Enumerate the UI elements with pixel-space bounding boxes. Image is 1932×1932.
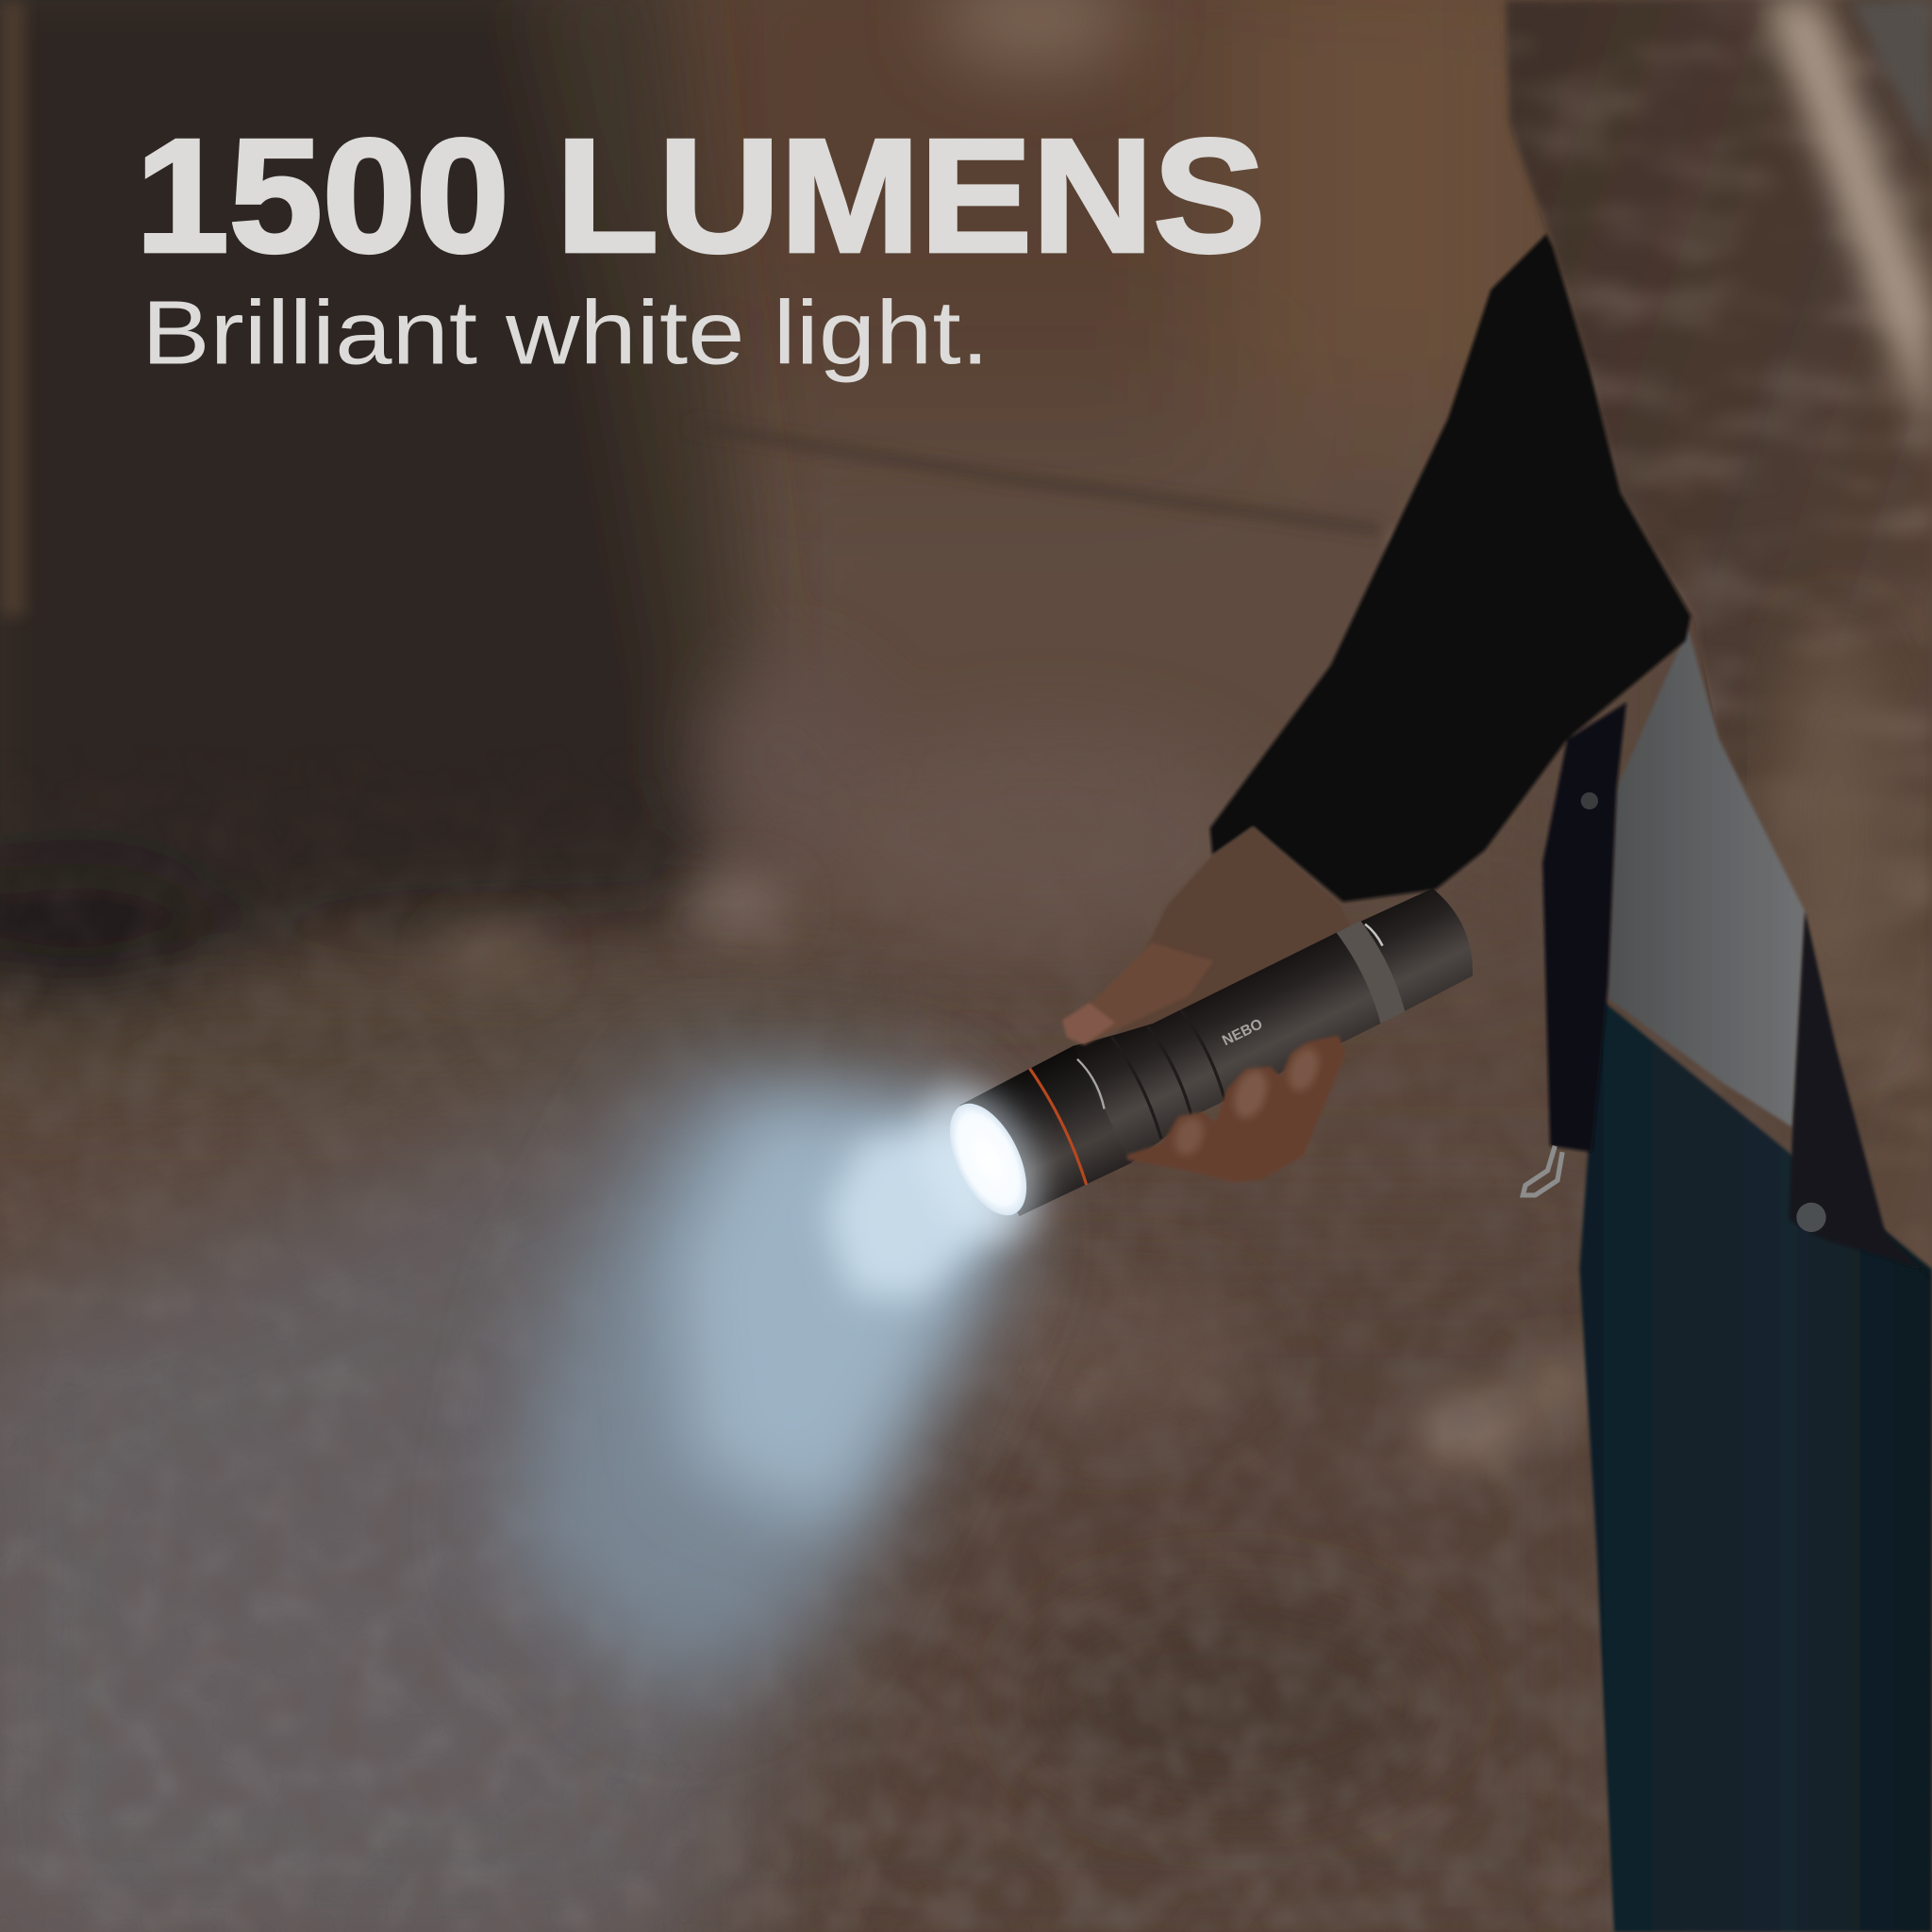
silver ring [1077,1057,1108,1110]
tail highlight [1365,922,1383,948]
flashlight haze on the ground [0,1059,1004,1932]
flashlight head [958,1046,1131,1220]
foreground tree trunk [1503,0,1932,1281]
flashlight [958,870,1492,1220]
person: grey shirt [1607,628,1805,1127]
flashlight body [958,870,1492,1220]
hand: back of hand [1109,826,1356,1059]
tail band [1337,919,1409,1024]
title: 1500 LUMENS [136,106,1265,286]
barrel grooves [1111,1002,1232,1139]
jacket details: snaps and zipper pull [1523,792,1826,1232]
flashlight lens glow [896,1066,1063,1262]
hand: fingers [1130,1039,1341,1179]
subtitle: Brilliant white light. [142,283,990,383]
hand: thumb [1062,942,1214,1045]
person: black jacket and sleeve [1210,234,1932,1281]
brand mark: NEBO [1220,1016,1265,1049]
orange ring [1030,1066,1091,1185]
gravel ground texture [6,887,1613,1932]
flashlight beam [506,1072,1001,1700]
person: jeans [1579,998,1932,1932]
